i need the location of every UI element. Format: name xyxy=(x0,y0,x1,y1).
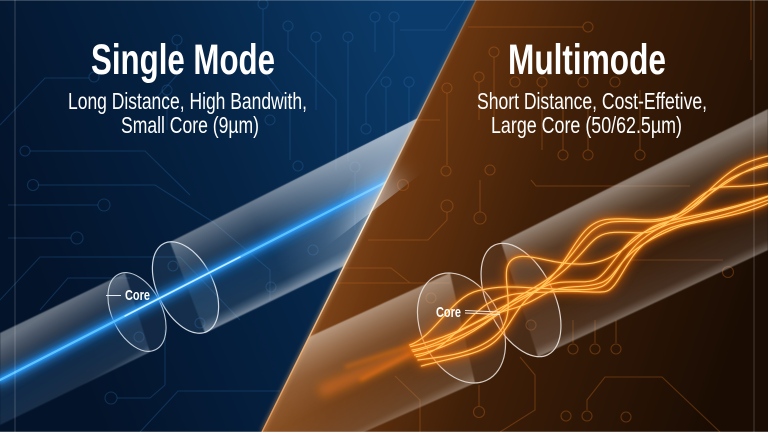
light beam: single path xyxy=(0,180,390,380)
single mode fiber xyxy=(0,118,418,425)
orange blurred streaks in left tube xyxy=(320,346,415,392)
text block: single mode traits: Long Distance, High Bandwith, xyxy=(68,88,307,114)
tube end face: right xyxy=(152,241,220,334)
heading: Multimode: Multimode xyxy=(508,36,666,84)
tube highlight near divider xyxy=(263,118,418,283)
divider: glowing diagonal xyxy=(262,0,476,432)
fiber segment: left tube xyxy=(0,273,150,425)
tube end face: right xyxy=(480,242,562,358)
fiber segment: right tube xyxy=(501,109,768,357)
text block: multimode traits xyxy=(477,88,707,138)
callout: multimode core: Core xyxy=(436,304,461,321)
tube end face: left xyxy=(107,272,167,352)
callout: single mode core xyxy=(106,287,150,304)
fiber segment: right tube xyxy=(170,118,417,334)
text block: single mode traits: Small Core (9µm) xyxy=(121,112,259,138)
circuit traces: multimode side xyxy=(300,0,751,432)
heading: Single Mode: Single Mode xyxy=(91,36,275,84)
tube end face: left xyxy=(416,272,506,384)
panel: single mode background xyxy=(0,0,480,432)
circuit traces: single mode side xyxy=(0,0,465,432)
multimode fiber xyxy=(250,109,768,432)
text block: multimode traits: Large Core (50/62.5µm) xyxy=(491,112,682,138)
fiber segment: left tube xyxy=(250,273,475,432)
callout: multimode core xyxy=(436,304,500,321)
callout: single mode core: Core xyxy=(125,287,150,304)
panel: multimode background xyxy=(260,0,768,432)
light beams: multiple paths xyxy=(410,156,768,366)
text block: single mode traits xyxy=(68,88,307,138)
